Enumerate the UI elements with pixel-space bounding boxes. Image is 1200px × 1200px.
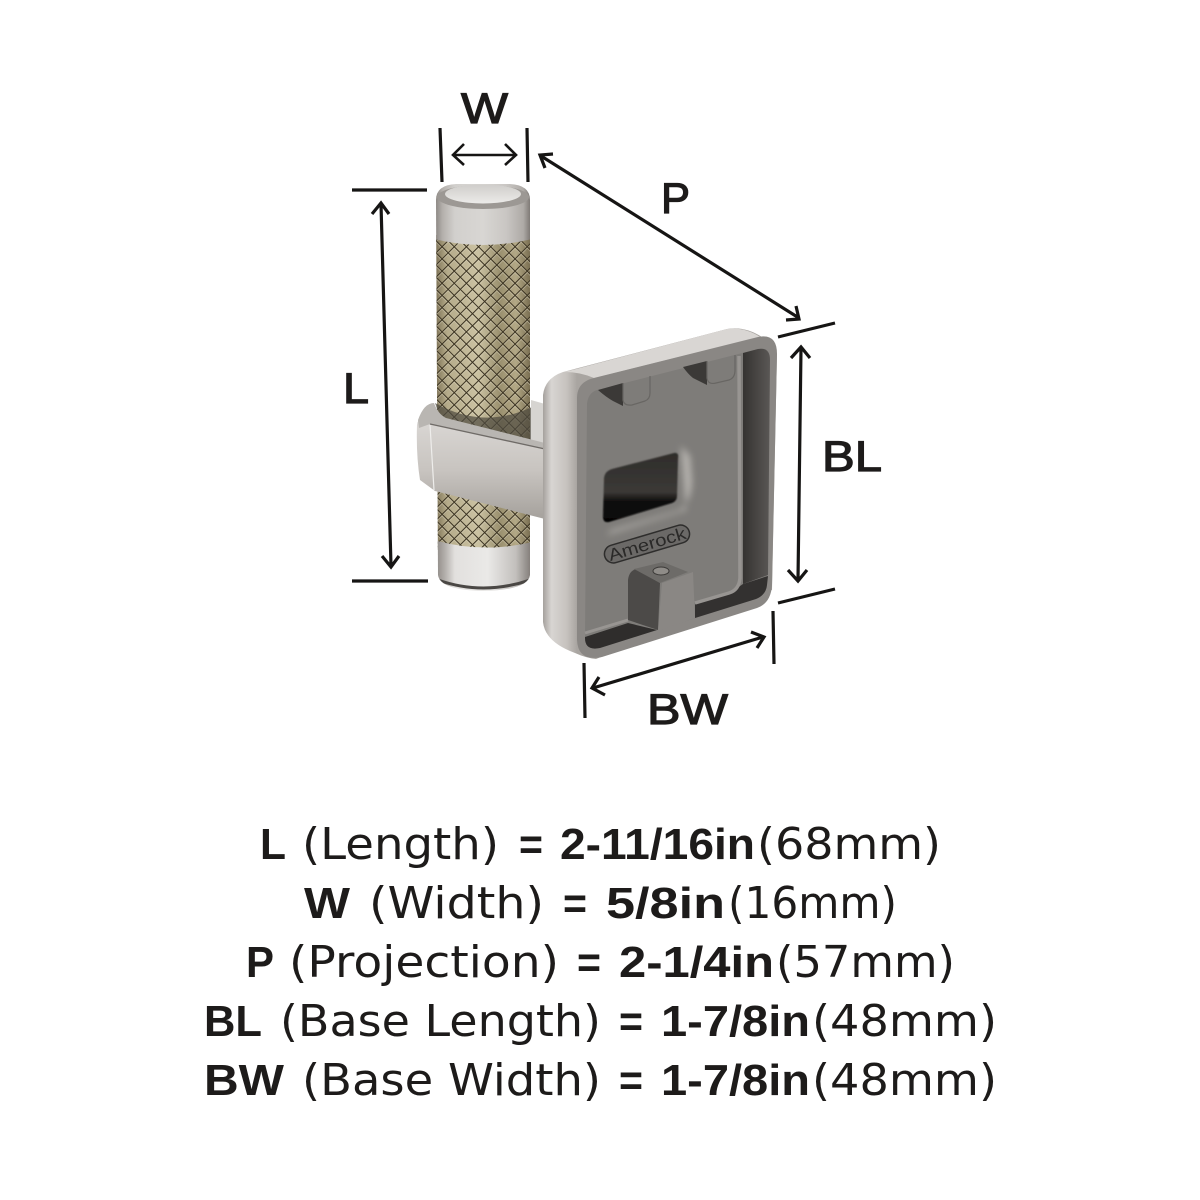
post top cap <box>434 180 532 245</box>
base shell side <box>543 328 777 659</box>
bottom tab front <box>658 572 695 631</box>
post top face <box>437 185 529 209</box>
spec line: projection <box>246 937 955 988</box>
L extension lines <box>352 190 428 581</box>
spec line: base width <box>204 1055 997 1106</box>
W arrow <box>453 144 516 165</box>
spec line: width: (16mm) <box>728 878 897 929</box>
spec line: width: (Width) <box>369 878 544 929</box>
BW arrow <box>592 632 764 695</box>
base dark lower-right channel <box>695 576 768 618</box>
BL arrow <box>788 347 810 581</box>
spec line: width: 5/8in <box>606 879 725 928</box>
spec line: base width: = <box>619 1056 643 1105</box>
BW label: BW <box>647 686 728 734</box>
BL label: BL <box>822 433 882 481</box>
spec line: length: L <box>260 820 286 869</box>
spec line: base length: BL <box>204 997 262 1046</box>
window opening <box>603 453 678 522</box>
P label: P <box>661 175 690 223</box>
spec line: length: = <box>519 820 543 869</box>
BL extension lines <box>778 323 835 603</box>
bottom tab hole <box>653 567 669 575</box>
base top edge <box>565 329 760 378</box>
bottom tab side <box>628 569 660 630</box>
base recess floor <box>585 349 770 649</box>
bottom tab top <box>634 562 688 583</box>
spec line: base width: 1-7/8in <box>661 1056 810 1105</box>
square base <box>543 328 777 659</box>
spec line: width: = <box>563 879 587 928</box>
spec line: base width: (48mm) <box>812 1055 997 1106</box>
base dark right wall <box>743 349 770 584</box>
spec line: width <box>304 878 897 929</box>
spec line: width: W <box>304 879 351 928</box>
spec line: projection: 2-1/4in <box>619 938 774 987</box>
dimension BW <box>584 611 774 734</box>
hook arm <box>417 403 545 519</box>
knurled post <box>434 180 532 595</box>
post knurled grip <box>434 235 532 550</box>
post bottom cap <box>438 541 530 591</box>
spec line: length: 2-11/16in <box>560 820 755 869</box>
top tab outlines <box>623 376 650 405</box>
spec line: base width: BW <box>204 1056 285 1105</box>
rib left lip <box>585 620 628 633</box>
spec line: length <box>260 819 941 870</box>
arm back edge <box>531 400 545 446</box>
spec line: projection: (Projection) <box>289 937 559 988</box>
dimension BL <box>778 323 882 603</box>
dimension W <box>440 85 528 182</box>
dimension P <box>540 154 799 320</box>
P arrow <box>540 154 799 320</box>
spec line: base width: (Base Width) <box>302 1055 601 1106</box>
W extension lines <box>440 128 528 182</box>
base dark lower-left channel <box>585 623 657 649</box>
top slot left <box>598 383 623 406</box>
product photo: hook with knurled post and square base <box>417 180 777 659</box>
L arrow <box>372 203 399 567</box>
spec line: length: (Length) <box>302 819 499 870</box>
specification list <box>204 819 997 1106</box>
arm shadow on post <box>435 403 532 446</box>
spec line: base length <box>204 996 997 1047</box>
base front rim <box>577 336 777 658</box>
spec line: projection: P <box>246 938 274 987</box>
spec line: projection: = <box>577 938 601 987</box>
post base shadow line <box>438 580 530 588</box>
L label: L <box>343 365 369 413</box>
Amerock logo <box>602 523 692 566</box>
window glow <box>606 446 692 535</box>
right tab outline <box>707 355 735 383</box>
spec line: projection: (57mm) <box>776 937 955 988</box>
spec line: length: (68mm) <box>757 819 941 870</box>
Amerock logo: Amerock <box>606 524 689 565</box>
post top highlight <box>445 184 521 204</box>
spec line: base length: (Base Length) <box>280 996 601 1047</box>
spec line: base length: = <box>619 997 643 1046</box>
spec line: base length: (48mm) <box>812 996 997 1047</box>
base rib <box>695 356 740 603</box>
BW extension lines <box>584 611 774 718</box>
spec line: base length: 1-7/8in <box>661 997 810 1046</box>
top slot right <box>683 361 707 385</box>
dimension L <box>343 190 428 581</box>
W label: W <box>461 85 508 133</box>
